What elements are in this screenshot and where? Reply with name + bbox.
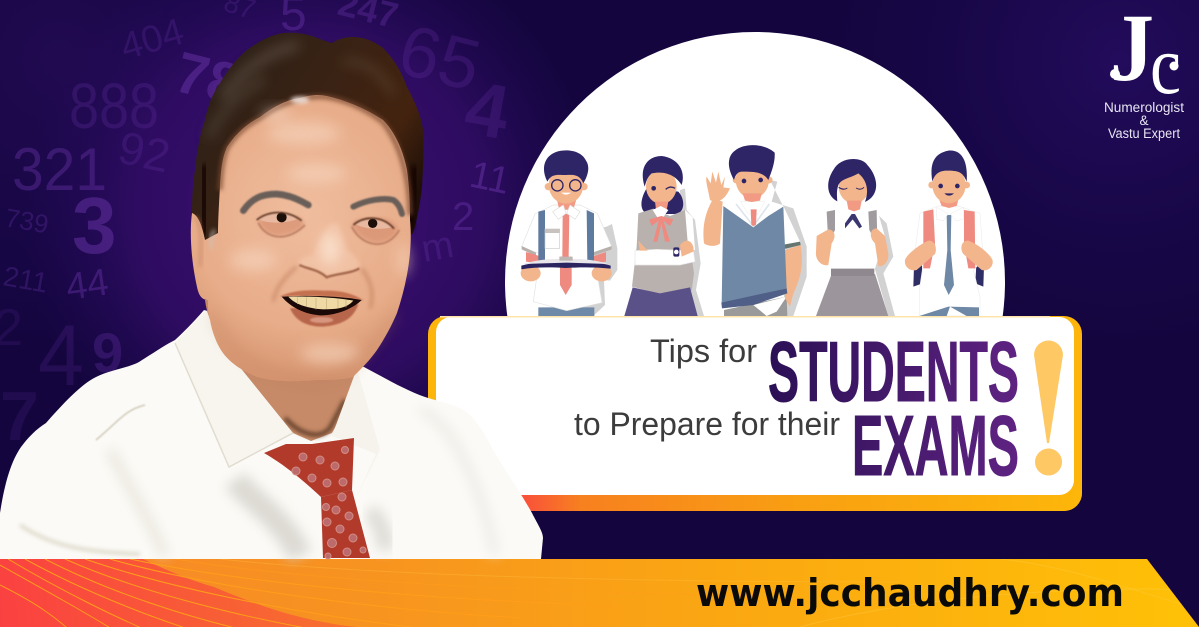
background numbers: 65 [391,10,488,107]
background numbers: m [418,224,457,271]
heading: Tips for: Tips for [650,333,757,369]
eye bags [258,217,304,236]
background numbers [0,0,515,455]
student 5: boy with salmon backpack [905,151,993,316]
mouth [282,296,362,315]
eyebrows [243,194,308,211]
hair back [192,33,423,250]
logo: Jc monogram: c [1150,19,1181,112]
students illustration [521,145,993,316]
red swoosh [0,559,357,627]
portrait of man [0,33,543,559]
bottom band [0,559,1199,627]
shirt [0,310,543,559]
background numbers: 92 [114,121,175,182]
background numbers: 321 [12,136,107,203]
heading: to Prepare for their: to Prepare for their [574,406,840,442]
background numbers: 78 [169,40,247,118]
logo [1104,0,1184,141]
background numbers: 404 [116,11,188,69]
logo: tagline: & [1139,113,1149,128]
white circle behind students [505,32,1005,316]
student 2: girl with crossed arms [624,156,704,316]
teeth [288,296,353,309]
student 1: boy with glasses and book [521,150,617,316]
curved lines [0,559,1199,627]
icon: exclamation mark [1034,340,1063,476]
background numbers: 888 [69,70,159,142]
hair highlights [203,46,415,230]
card bottom gradient strip [500,490,1082,511]
logo: tagline [1104,100,1184,141]
background numbers: 44 [63,261,111,309]
heading: EXAMS: EXAMS [852,399,1019,494]
lower lip [290,304,358,327]
logo: Jc monogram [1110,0,1181,112]
background numbers: 11 [466,154,513,203]
jaw shadow [213,313,397,380]
temple grey [211,230,215,248]
upper lip [279,290,364,301]
tie [264,438,370,559]
background numbers: 9 [92,321,123,384]
eyes [258,214,297,223]
face shading and features [195,97,409,380]
face and ear [191,95,411,381]
logo: tagline: Vastu Expert [1108,126,1180,141]
background numbers: 7 [0,377,39,455]
neck [205,300,358,441]
background numbers: 211 [1,260,50,299]
soft hairline [220,97,410,215]
nose [298,223,360,277]
background numbers: 4 [38,308,84,404]
background numbers: 2 [452,195,474,239]
background numbers: 3 [72,181,116,270]
shirt shading [20,405,495,556]
left collar [175,310,293,467]
skin highlights [230,122,409,363]
background numbers: 4 [459,65,515,156]
student 3: boy waving [703,145,807,316]
student 4: girl with grey skirt [816,159,895,316]
ear detail [195,217,201,267]
website url: www.jcchaudhry.com [696,571,1124,615]
right collar [332,368,380,500]
title card [428,316,1082,511]
background numbers: 739 [3,202,51,239]
smile lines [273,267,372,308]
logo: tagline: Numerologist [1104,100,1184,115]
